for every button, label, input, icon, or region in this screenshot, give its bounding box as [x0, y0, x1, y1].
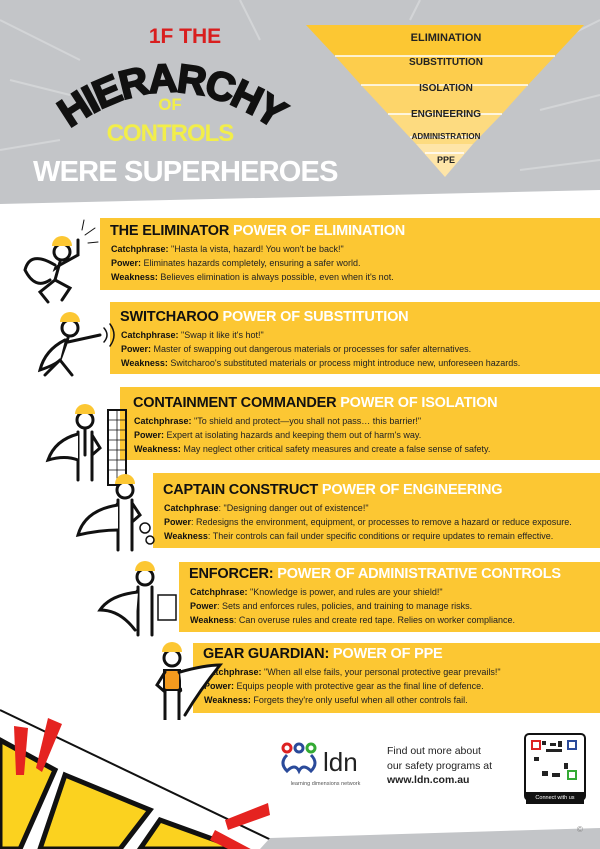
- panel: eliminator: THE ELIMINATOR POWER OF ELIMINATION: [110, 223, 405, 239]
- panel: gear guardian: Power: Equips people with protective gear as the final line of defence.: [204, 681, 484, 691]
- panel: captain construct: Power: Redesigns the environment, equipment, or processes to remove a hazard or reduce exposure.: [164, 517, 572, 527]
- panel: containment commander: [120, 387, 600, 460]
- pyramid: ELIMINATION: [411, 32, 481, 44]
- icon: captain construct hero: [78, 474, 154, 550]
- header background: [0, 0, 600, 204]
- heroes figures: [23, 220, 223, 720]
- comic burst: [0, 709, 270, 849]
- panel: enforcer: Power: Sets and enforces rules, policies, and training to manage risks.: [190, 601, 472, 611]
- title OF: OF: [158, 95, 182, 114]
- panel: eliminator: Catchphrase: "Hasta la vista, hazard! You won't be back!": [111, 244, 344, 254]
- pyramid: ADMINISTRATION: [412, 132, 481, 141]
- title CONTROLS: CONTROLS: [107, 120, 233, 147]
- title WERE SUPERHEROES: WERE SUPERHEROES: [33, 156, 338, 188]
- pyramid: [306, 25, 584, 177]
- pyramid: PPE: [437, 155, 455, 165]
- footer text: our safety programs at: [387, 760, 492, 772]
- qr code: [524, 733, 586, 801]
- panel: gear guardian: Weakness: Forgets they're only useful when all other controls fail.: [204, 695, 468, 705]
- icon: red exclamation marks: [14, 718, 270, 849]
- panel: gear guardian: GEAR GUARDIAN: POWER OF PPE: [203, 646, 443, 662]
- panel: switcharoo: SWITCHAROO POWER OF SUBSTITUTION: [120, 309, 408, 325]
- panel: switcharoo: Power: Master of swapping out dangerous materials or processes for safer alternatives.: [121, 344, 471, 354]
- panel: switcharoo: Catchphrase: "Swap it like it's hot!": [121, 330, 264, 340]
- panel: captain construct: Catchphrase: "Designing danger out of existence!": [164, 503, 369, 513]
- panel: switcharoo: Weakness: Switcharoo's substituted materials or process might introduce new, unforeseen hazards.: [121, 358, 520, 368]
- panel: captain construct: CAPTAIN CONSTRUCT POWER OF ENGINEERING: [163, 482, 502, 498]
- panel: enforcer: Weakness: Can overuse rules and create red tape. Relies on worker compliance.: [190, 615, 515, 625]
- pyramid: ISOLATION: [419, 83, 473, 94]
- panel: switcharoo: [110, 302, 600, 374]
- panel: containment commander: Power: Expert at isolating hazards and keeping them out of harm's way.: [134, 430, 421, 440]
- panel: containment commander: Catchphrase: "To shield and protect—you shall not pass… this barrier!": [134, 416, 421, 426]
- icon: gear guardian hero: [157, 642, 220, 720]
- footer text: [387, 745, 492, 786]
- title: [33, 25, 338, 188]
- icon: switcharoo hero: [40, 312, 114, 375]
- panel: gear guardian: Catchphrase: "When all else fails, your personal protective gear prevails!": [204, 667, 501, 677]
- panel: gear guardian: [193, 643, 600, 713]
- footer text: www.ldn.com.au: [387, 774, 469, 786]
- panel: eliminator: [100, 218, 600, 290]
- panel: containment commander: CONTAINMENT COMMANDER POWER OF ISOLATION: [133, 395, 497, 411]
- qr code: Connect with us: [535, 795, 575, 801]
- panel: enforcer: ENFORCER: POWER OF ADMINISTRATIVE CONTROLS: [189, 566, 561, 582]
- ldn logo: [281, 742, 360, 787]
- ldn logo: learning dimensions network: [291, 781, 360, 787]
- panel: containment commander: Weakness: May neglect other critical safety measures and create a false sense of safety.: [134, 444, 490, 454]
- copyright: ©: [577, 825, 583, 834]
- panel: enforcer: Catchphrase: "Knowledge is power, and rules are your shield!": [190, 587, 443, 597]
- footer text: Find out more about: [387, 745, 481, 757]
- panel: enforcer: [179, 562, 600, 632]
- panel: eliminator: Weakness: Believes elimination is always possible, even when it's not.: [111, 272, 394, 282]
- icon: enforcer hero: [100, 561, 176, 635]
- pyramid: SUBSTITUTION: [409, 57, 483, 68]
- panel: captain construct: Weakness: Their controls can fail under specific conditions or require updates to remain effective.: [164, 531, 553, 541]
- title line 1: 1F THE: [149, 25, 221, 48]
- icon: containment hero: [48, 404, 126, 485]
- title line HIERARCHY: HIERARCHY: [56, 63, 292, 128]
- pyramid: ENGINEERING: [411, 109, 481, 120]
- panel: captain construct: [153, 473, 600, 548]
- panel: eliminator: Power: Eliminates hazards completely, ensuring a safer world.: [111, 258, 360, 268]
- icon: eliminator hero: [25, 220, 98, 302]
